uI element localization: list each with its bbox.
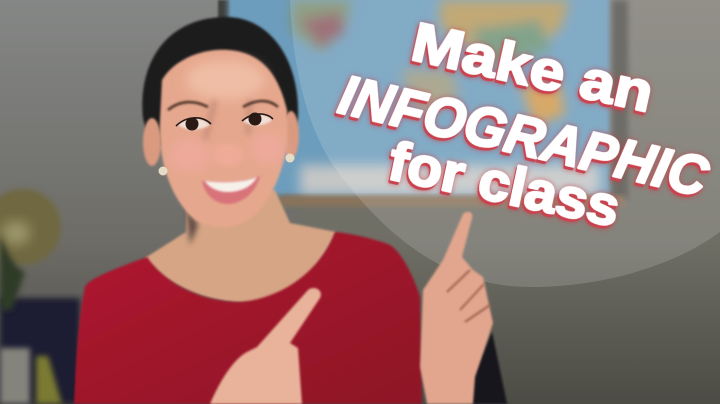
left hand bbox=[210, 288, 321, 404]
eyes bbox=[176, 112, 273, 130]
title: INFOGRAPHIC: INFOGRAPHIC bbox=[333, 62, 715, 209]
right hand bbox=[420, 212, 493, 404]
teeth bbox=[205, 177, 257, 192]
ears bbox=[143, 111, 299, 166]
red top bbox=[74, 232, 422, 404]
world map on wall bbox=[218, 0, 628, 206]
forehead highlight bbox=[185, 60, 265, 100]
face bbox=[160, 50, 288, 227]
nose bbox=[213, 144, 243, 166]
title: Make an: Make an bbox=[406, 10, 659, 124]
lips bbox=[202, 176, 260, 204]
eyebrows bbox=[168, 101, 278, 110]
neck shadow bbox=[186, 205, 198, 245]
chair bbox=[470, 332, 507, 404]
cheeks bbox=[170, 139, 210, 171]
translucent circle bbox=[290, 0, 720, 287]
person bbox=[74, 17, 493, 404]
neck and chest bbox=[145, 190, 336, 303]
finger creases bbox=[447, 270, 490, 322]
earrings bbox=[158, 166, 168, 176]
title: for class: for class bbox=[384, 129, 625, 238]
hair bbox=[142, 17, 298, 145]
globe and shelf bbox=[0, 189, 80, 404]
